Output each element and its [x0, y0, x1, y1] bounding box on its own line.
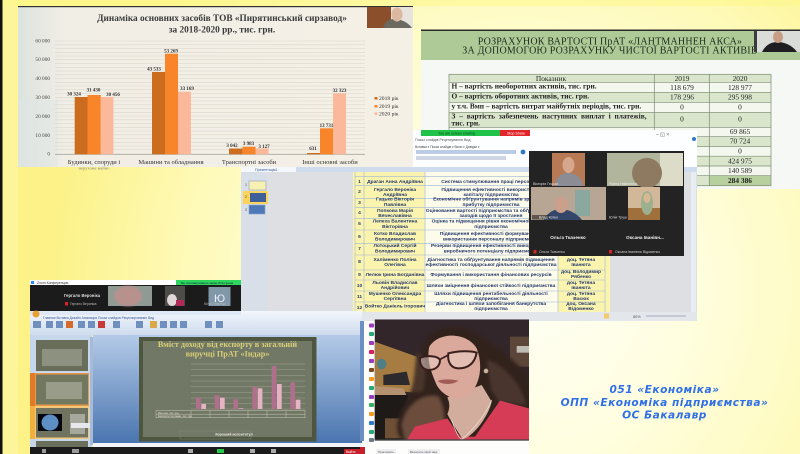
- status bar: [241, 312, 697, 321]
- slide: table of topics: Гацько Вікторія: [376, 196, 414, 202]
- bar chart: 20 000: [35, 114, 50, 120]
- table: О – вартість оборотних активів, тис. грн.: [452, 92, 589, 100]
- slide: table of topics: Павлівна: [384, 202, 406, 208]
- legend: 2018 рік: [379, 96, 399, 102]
- table: 2019: [675, 74, 690, 83]
- zoom participant strip: [30, 285, 241, 311]
- panel: PowerPoint with export revenue slide in Zoom: [30, 280, 364, 454]
- bar chart: 31 430: [87, 88, 101, 94]
- slide: table of topics: Вячеславівна: [378, 213, 412, 219]
- slide: table of topics: Підвищення ефективності формування та: [440, 230, 543, 237]
- zoom participant strip: Гергало Вероніка: [64, 293, 101, 298]
- slide title: [462, 36, 758, 56]
- slide header band: [421, 31, 800, 60]
- bar chart: 10 000: [35, 133, 50, 139]
- panel: PowerPoint with export revenue slide in Zoom: Zoom Конференция: [37, 281, 68, 285]
- participant tile: Polina Halimenko: [607, 153, 683, 188]
- participant tile: Вікторія Гецько: Вікторія Гецько: [533, 182, 558, 186]
- panel: participant list behind webcam: [360, 321, 529, 454]
- table: Показник: [536, 74, 567, 83]
- zoom participant strip: Гергало Вероніка: [70, 302, 97, 306]
- slide: table of topics: використання персоналу підприємства: [443, 236, 539, 242]
- panel: participant list behind webcam: Включить свой звук: [410, 450, 438, 454]
- zoom toolbar: [30, 447, 364, 454]
- slide: table of topics: Льовін Владислав: [372, 280, 418, 286]
- panel: net asset value table slide: [421, 30, 800, 189]
- slide: table of topics: 10: [357, 283, 362, 289]
- table: Н – вартість необоротних активів, тис. грн.: [452, 82, 597, 90]
- panel: zoom sharing bar: [421, 130, 530, 136]
- slide title: РОЗРАХУНОК ВАРТОСТІ ПрАТ «ЛАНТМАННЕН АКСА»: [478, 36, 742, 47]
- table: у т.ч. Вмп – вартість витрат майбутніх періодів, тис. грн.: [452, 102, 641, 110]
- slide: table of topics: Лепеха Валентина: [373, 218, 418, 224]
- table: 140 589: [728, 166, 752, 175]
- slide: table of topics: 5: [358, 221, 361, 227]
- slide: table of topics: 11: [357, 294, 362, 300]
- ribbon: – ◱ ×: [656, 132, 669, 138]
- table: 424 975: [728, 156, 752, 166]
- participant tile: Оксана Іванівна: Оксана Іванівна Відоменко: [615, 250, 660, 254]
- participant tile: Ольга Ткаченко: Ольга Ткаченко: [539, 250, 565, 254]
- slide: table of topics: Лотоцький Сергій: [373, 242, 417, 249]
- slide: table of topics: 4: [358, 210, 361, 216]
- status bar: Слайд 2 из 3 "Воздушный поток" русский: [244, 315, 316, 319]
- slide: table of topics: Андріївна: [383, 192, 407, 198]
- ribbon: [241, 130, 697, 172]
- slide: table of topics: Іванюта: [571, 285, 591, 291]
- scrollbar: [691, 172, 696, 312]
- panel: zoom sharing bar: Stop Share: [507, 132, 525, 136]
- participant tile: Юлія Труш: Юлія Труш: [609, 216, 627, 220]
- slide: table of topics: доц. Оксана: [566, 301, 596, 307]
- caption: programme and degree: [561, 384, 768, 422]
- face: [428, 336, 480, 398]
- neck and chest: [447, 385, 492, 439]
- bar chart: 30 324: [67, 92, 81, 98]
- table: [449, 74, 771, 186]
- data table: Виручка, тис. грн.: [158, 411, 180, 415]
- slide: table of topics: Іванюта: [571, 262, 591, 268]
- slide: table of topics: 12: [357, 305, 362, 311]
- slide title: Вміст доходу від експорту в загальній: [158, 340, 297, 349]
- webcam thumbnail: [367, 7, 413, 28]
- slide: table of topics: Оцінка та підвищення рівня економічної безпеки: [432, 218, 550, 224]
- panel: PowerPoint with export revenue slide in Zoom: Вы просматриваете экран Лілія Ірина: [181, 281, 233, 285]
- table: 118 679: [670, 83, 694, 92]
- slide: table of topics: Підвищення ефективності використання: [441, 186, 541, 193]
- status bar: 80%: [633, 315, 641, 319]
- table: 0: [680, 102, 684, 112]
- chart title: [97, 13, 347, 36]
- bar chart: 3 983: [243, 142, 255, 147]
- slide thumbnails pane: [30, 335, 104, 447]
- chart title: за 2018-2020 рр., тис. грн.: [169, 26, 275, 36]
- caption: programme and degree: ОПП «Економіка підприємства»: [561, 397, 768, 409]
- bar chart: 13 731: [320, 124, 334, 129]
- ribbon: Вставка ▾ Показ слайдів ▾ Вікно ▾ Довідка ▾: [415, 145, 480, 149]
- table: 0: [738, 146, 742, 156]
- panel: fixed assets chart slide: [18, 6, 413, 167]
- globe image thumbnail: [38, 414, 62, 431]
- slide: table of topics: підприємства: [474, 306, 508, 312]
- slide: table of topics: капіталу підприємства: [463, 192, 519, 198]
- glasses: [420, 351, 477, 370]
- slide: table of topics: Попкова Марія: [377, 208, 413, 214]
- ribbon: Презентація1: [255, 168, 278, 172]
- slide: table of topics: Рябенко: [571, 273, 591, 280]
- bar chart: 32 323: [333, 89, 347, 94]
- slide title: ЗА ДОПОМОГОЮ РОЗРАХУНКУ ЧИСТОЇ ВАРТОСТІ АКТИВІВ: [462, 44, 758, 56]
- panel: zoom participants gallery: [529, 151, 684, 256]
- slide: table of topics: Шляхи підвищення рентабельності діяльності: [434, 290, 548, 297]
- bar chart: 33 169: [180, 87, 194, 92]
- bar chart: 0: [47, 152, 50, 158]
- table: 295 998: [728, 92, 752, 102]
- slide: table of topics: доц. Тетяна: [567, 257, 595, 263]
- slide: table of topics: 1: [358, 179, 361, 185]
- participant tile: Вікторія Гецько: [533, 153, 585, 186]
- legend: 2019 рік: [379, 104, 399, 110]
- slide: table of topics: Вікторівна: [382, 224, 408, 230]
- participant tile: Влад Котко: [531, 187, 606, 220]
- slide: table of topics: виробничого потенціалу підприємства: [444, 248, 539, 254]
- necklace: [452, 400, 492, 439]
- slide: table of topics: Резерви підвищення ефективності використання: [431, 242, 551, 249]
- slide: table of topics: 2: [358, 189, 361, 195]
- slide: table of topics: Халіменко Поліна: [374, 257, 417, 263]
- panel: PowerPoint window with thesis topics table: [241, 130, 697, 321]
- table: З – вартість забезпечень наступних виплат і платежів,: [452, 112, 647, 120]
- slide: table of topics: 6: [358, 234, 361, 240]
- participant tile: Polina Halimenko: Polina Halimenko: [609, 182, 637, 186]
- slide title: виручці ПрАТ «Індар»: [186, 350, 269, 358]
- slide: table of topics: Система стимулювання праці персоналу: [441, 179, 541, 185]
- bar chart: 631: [309, 147, 317, 152]
- slide: table of topics: 7: [358, 246, 361, 252]
- slide: table of topics: Драган Анна Андріївна: [367, 179, 423, 185]
- chart title: Динаміка основних засобів ТОВ «Пирятинський сирзавод»: [97, 13, 347, 24]
- participant tile: Оксана Іванівна: Оксана Іванівн...: [626, 235, 664, 240]
- slide: table of topics: Володимирович: [375, 248, 415, 254]
- bar chart: 60 000: [35, 38, 50, 44]
- slide thumbnails pane: 3: [245, 208, 247, 212]
- table: 69 865: [730, 127, 750, 136]
- slide: table of topics: [353, 172, 610, 312]
- slide: table of topics: Володимирович: [375, 236, 415, 242]
- slide: table of topics: 9: [358, 272, 361, 278]
- slide: table of topics: Войтко Даніель Ігорович: [365, 302, 425, 310]
- bar chart: 3 042: [226, 144, 238, 149]
- slide: table of topics: Шляхи зміцнення фінансової стійкості підприємства: [427, 282, 556, 289]
- shirt: [407, 401, 529, 440]
- bar chart: 53 269: [164, 49, 178, 54]
- slide: table of topics: Васюк: [573, 296, 589, 302]
- earring: [484, 369, 488, 373]
- table: 70 724: [730, 136, 750, 146]
- bar chart: Машини та обладнання: [138, 159, 204, 166]
- slide: table of topics: Діагностика та обґрунтування напрямів підвищення: [427, 256, 555, 263]
- bar chart: 3 127: [258, 145, 270, 150]
- table: тис. грн.: [452, 118, 480, 128]
- table: 0: [680, 114, 684, 124]
- slide: table of topics: ефективності господарської діяльності підприємства: [426, 261, 557, 268]
- slide: table of topics: 8: [358, 259, 361, 265]
- slide: table of topics: доц. Володимир: [561, 269, 601, 275]
- bar chart: Будинки, споруди і: [68, 159, 120, 166]
- zoom toolbar: Выйти: [346, 450, 356, 454]
- hair: [397, 327, 530, 440]
- zoom participant strip: Ю: [214, 293, 225, 305]
- slide: table of topics: 3: [358, 200, 361, 206]
- legend: [374, 96, 399, 118]
- slide: table of topics: Мушенко Олександра: [369, 291, 421, 297]
- bar chart: 43 533: [147, 68, 161, 72]
- slide thumbnails pane: 2: [245, 195, 247, 199]
- cut-off axis label: нерухоме майно: [79, 166, 110, 170]
- table: 178 296: [670, 92, 694, 102]
- slide: table of topics: підприємства: [474, 224, 508, 230]
- data table: [156, 411, 305, 418]
- ribbon: [30, 310, 362, 335]
- participant tile: Ольга Ткаченко: Ольга Ткаченко: [550, 235, 586, 240]
- slide: table of topics: Котко Владислав: [374, 231, 416, 237]
- legend: 2020 рік: [379, 112, 399, 118]
- slide: table of topics: Відоменко: [568, 306, 594, 312]
- bar chart: Транспортні засоби: [222, 159, 277, 166]
- lips: [438, 379, 459, 384]
- slide: table of topics: Оцінювання вартості підприємства та обґрунтування: [426, 207, 556, 214]
- room: [374, 342, 418, 392]
- table: 2020: [733, 74, 748, 83]
- table: 284 386: [728, 176, 752, 185]
- participant tile: Влад Котко: Влад Котко: [539, 216, 558, 220]
- webcam photo: young woman with curly hair and glasses: [375, 319, 530, 441]
- webcam thumbnail: [754, 31, 800, 52]
- slide: table of topics: Олегівна: [384, 262, 406, 268]
- caption: programme and degree: ОС Бакалавр: [622, 410, 707, 422]
- panel: participant list behind webcam: Пригласить: [378, 450, 394, 454]
- slide: export revenue chart: Хороший колонтитул: [215, 432, 254, 436]
- slide: table of topics: Лелюк Ірина Богданівна: [366, 272, 425, 278]
- slide: table of topics: доц. Тетяна: [567, 280, 595, 286]
- bar chart: 30 000: [35, 95, 50, 101]
- slide title: [158, 340, 297, 358]
- table: 0: [738, 114, 742, 124]
- slide: table of topics: Діагностика і шляхи запобігання банкрутства: [436, 300, 546, 307]
- ribbon: Главная Вставка Дизайн Анимация Показ слайдов Рецензирование Вид: [43, 316, 154, 320]
- table: 0: [738, 102, 742, 112]
- bar chart: Інші основні засоби: [302, 159, 358, 166]
- ribbon: Показ слайдів Рецензування Вид: [415, 138, 471, 142]
- panel: zoom sharing bar: You are screen sharing: [438, 132, 475, 136]
- slide: table of topics: Сергіївна: [384, 296, 407, 302]
- zoom participant strip: Юлія Левченко: [204, 302, 226, 306]
- slide: export revenue chart: [139, 337, 316, 442]
- slide: table of topics: підприємства: [474, 296, 508, 302]
- slide thumbnails pane: [241, 172, 268, 312]
- bar chart: [35, 38, 365, 166]
- caption: programme and degree: 051 «Економіка»: [609, 384, 720, 396]
- participant tile: Юлія Труш: [609, 187, 660, 220]
- participant tile: Ольга Ткаченко: [534, 235, 586, 254]
- slide: table of topics: Гергало Вероніка: [374, 187, 416, 193]
- slide: table of topics: Формування і використання фінансових ресурсів: [430, 271, 552, 278]
- bar chart: 30 456: [106, 93, 120, 98]
- data table: Експортні поставки, тис. грн.: [158, 414, 193, 418]
- slide: table of topics: заходів щодо її зростання: [460, 213, 523, 219]
- main work area: [93, 335, 362, 443]
- participant tile: Оксана Іванівна: [609, 235, 664, 254]
- table: 128 977: [728, 83, 752, 92]
- slide: table of topics: Андрійович: [381, 284, 410, 291]
- slide: table of topics: Економічне обґрунтування напрямів зростання: [433, 196, 549, 202]
- slide thumbnails pane: 1: [245, 183, 247, 187]
- slide: table of topics: прибутку підприємства: [462, 201, 520, 208]
- column chart: [196, 366, 300, 409]
- slide: table of topics: доц. Тетяна: [567, 291, 595, 297]
- bar chart: 40 000: [35, 76, 50, 82]
- bar chart: 50 000: [35, 57, 50, 63]
